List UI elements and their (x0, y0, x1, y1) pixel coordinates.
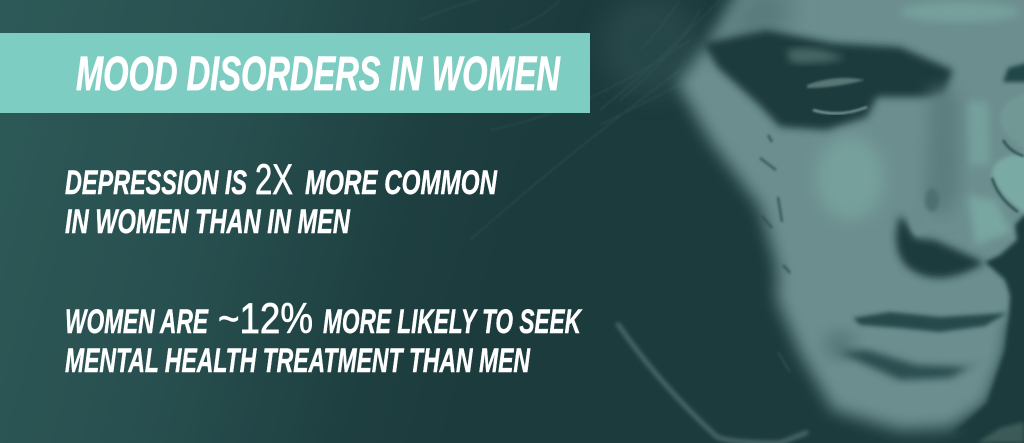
stat: treatment: MENTAL HEALTH TREATMENT THAN MEN (65, 342, 531, 380)
nose-side shade (925, 90, 960, 220)
eye socket shadow (703, 30, 953, 130)
hand: upper finger (1000, 92, 1024, 152)
nostril shadow (896, 215, 985, 278)
stat: treatment: WOMEN ARE (65, 303, 209, 341)
brow detail (787, 48, 845, 63)
title band (0, 33, 590, 113)
lower right scarf (977, 422, 1024, 443)
nose highlight: bridge (968, 102, 990, 165)
stat: depression (65, 156, 498, 241)
stat: treatment (65, 295, 583, 380)
forehead highlight (900, 2, 1020, 22)
eyelid (807, 78, 865, 88)
cheek highlight (816, 136, 884, 220)
lower eyelid (813, 107, 867, 113)
dark right of nose (955, 212, 1024, 432)
photo: woman's face (420, 0, 1024, 443)
stat: depression: IN WOMEN THAN IN MEN (65, 203, 351, 241)
nose wing (910, 201, 926, 235)
tear marks (760, 135, 790, 372)
face skin (677, 0, 1024, 430)
eye corner right (1003, 62, 1024, 82)
stat: depression: MORE COMMON (305, 164, 498, 202)
forehead shade (720, 0, 790, 50)
stat: treatment: MORE LIKELY TO SEEK (323, 303, 583, 341)
nose fold (925, 188, 939, 212)
finger crease (992, 140, 1024, 212)
collar (617, 323, 808, 443)
nose highlight: tip (968, 195, 1012, 245)
hair sheen (600, 0, 700, 95)
hand: lower finger (992, 153, 1024, 216)
mouth corner shade (824, 331, 856, 359)
under-lip shadow (838, 350, 980, 380)
upper lip shadow (853, 312, 1007, 332)
hair strands (420, 0, 720, 240)
heading: MOOD DISORDERS IN WOMEN (76, 48, 561, 101)
stat: depression: DEPRESSION IS (65, 164, 247, 202)
stat: depression: 2X (255, 156, 293, 204)
stat: treatment: ~12% (218, 295, 313, 343)
